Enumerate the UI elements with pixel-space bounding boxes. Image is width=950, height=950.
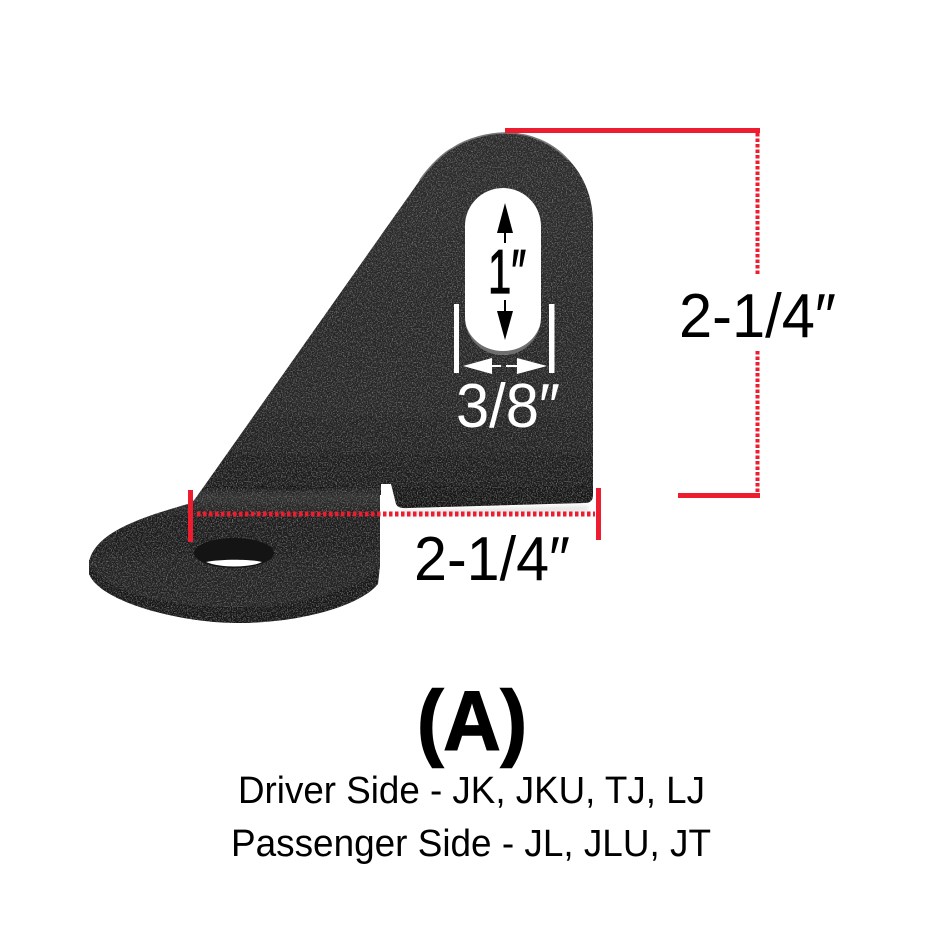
part letter heading: (A)	[417, 674, 527, 768]
white extension ticks	[454, 304, 554, 373]
foot side thickness	[89, 560, 380, 623]
upright plate with slot	[200, 133, 593, 508]
slot height dimension: 1 inch	[488, 203, 526, 340]
top rim highlight	[420, 133, 568, 180]
foot mounting hole	[194, 538, 274, 568]
shadow under bracket	[400, 506, 588, 516]
driver side fitment text: Driver Side - JK, JKU, TJ, LJ	[238, 770, 705, 812]
arrow up	[497, 203, 513, 243]
bottom red line	[678, 493, 760, 498]
dotted vertical line lower	[756, 351, 760, 494]
white double arrow	[463, 358, 547, 374]
slot width dimension: 3/8 inch	[454, 304, 560, 441]
right red tick	[596, 488, 601, 540]
top red line	[505, 128, 760, 133]
label height: 2-1/4″	[679, 282, 836, 351]
label width: 2-1/4″	[414, 525, 570, 594]
label 3/8 inch: 3/8″	[456, 372, 560, 441]
bracket photo	[89, 133, 593, 623]
dotted vertical line upper	[756, 133, 760, 276]
dotted horizontal line	[197, 512, 595, 516]
arrow down	[497, 300, 513, 340]
foot top face	[89, 484, 380, 607]
height dimension: 2-1/4 inch	[505, 128, 836, 498]
left red tick	[188, 490, 193, 542]
label 1 inch: 1″	[488, 238, 526, 307]
width dimension: 2-1/4 inch	[188, 488, 601, 594]
passenger side fitment text: Passenger Side - JL, JLU, JT	[231, 823, 711, 865]
slot inner edge highlight	[466, 325, 540, 355]
